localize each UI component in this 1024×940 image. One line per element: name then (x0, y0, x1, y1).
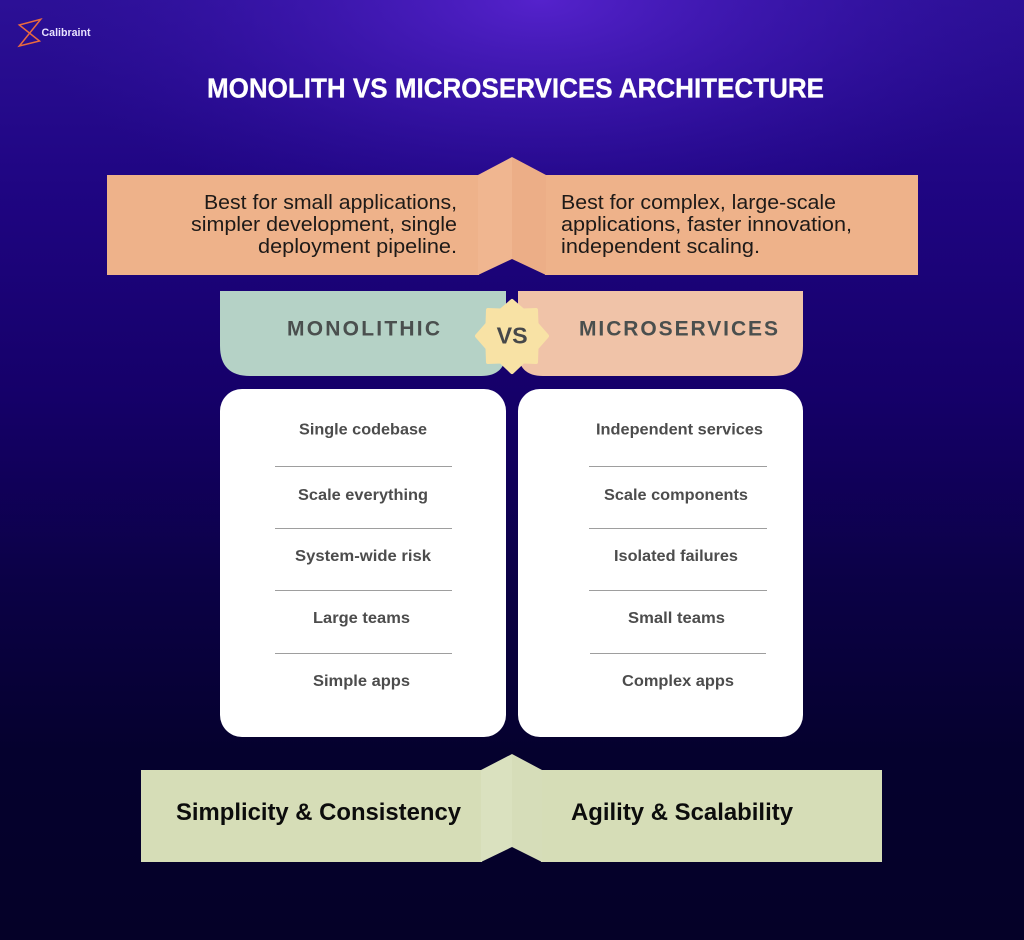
text: agility and scalability: Agility & Scalability (571, 799, 794, 826)
title: MONOLITH VS MICROSERVICES ARCHITECTURE (207, 72, 824, 104)
header label microservices: MICROSERVICES (579, 318, 778, 340)
list text: Simple apps (313, 673, 410, 690)
panel: top folded banner (107, 157, 918, 275)
text: monolith best for: Best for small applications, (204, 192, 457, 214)
list text: Scale everything (298, 487, 428, 504)
text: monolith best for: simpler development, single (191, 214, 457, 236)
panel: monolithic list (220, 389, 506, 737)
header shape monolithic (220, 291, 506, 376)
icon: zigzag logo mark (19, 19, 41, 46)
badge: VS (477, 301, 547, 372)
header: microservices (518, 291, 803, 376)
banner left side (141, 770, 482, 862)
card background (518, 389, 803, 737)
list text: System-wide risk (295, 548, 431, 565)
text: simplicity and consistency: Simplicity & Consistency (176, 799, 462, 826)
text: monolith best for (191, 192, 457, 258)
panel: bottom folded banner (141, 754, 882, 862)
text: microservices best for: applications, faster innovation, (561, 214, 852, 236)
text: monolith best for: deployment pipeline. (258, 236, 457, 258)
list text: Independent services (596, 422, 763, 438)
list text (295, 422, 431, 690)
banner fold left (481, 754, 512, 862)
logo: Calibraint (19, 19, 91, 46)
logo wordmark: Calibraint (42, 27, 91, 39)
banner right side (545, 175, 918, 275)
list text: Scale components (604, 487, 748, 504)
list text (596, 422, 763, 690)
banner fold left (478, 157, 512, 275)
panel: microservices list (518, 389, 803, 737)
banner right side (541, 770, 882, 862)
banner fold right (512, 754, 542, 862)
banner fold right (512, 157, 546, 275)
list text: Isolated failures (614, 548, 738, 565)
list text: Small teams (628, 610, 725, 627)
badge star shape (477, 301, 547, 372)
list text: Single codebase (299, 422, 427, 438)
header label monolithic: MONOLITHIC (287, 318, 440, 340)
text: microservices best for: independent scaling. (561, 236, 760, 258)
header shape microservices (518, 291, 803, 376)
card background (220, 389, 506, 737)
banner left side (107, 175, 479, 275)
list text: Large teams (313, 610, 410, 627)
header: monolithic (220, 291, 506, 376)
text: microservices best for: Best for complex, large-scale (561, 192, 836, 214)
badge label: VS (497, 323, 528, 349)
list text: Complex apps (622, 673, 734, 690)
text: microservices best for (561, 192, 852, 258)
